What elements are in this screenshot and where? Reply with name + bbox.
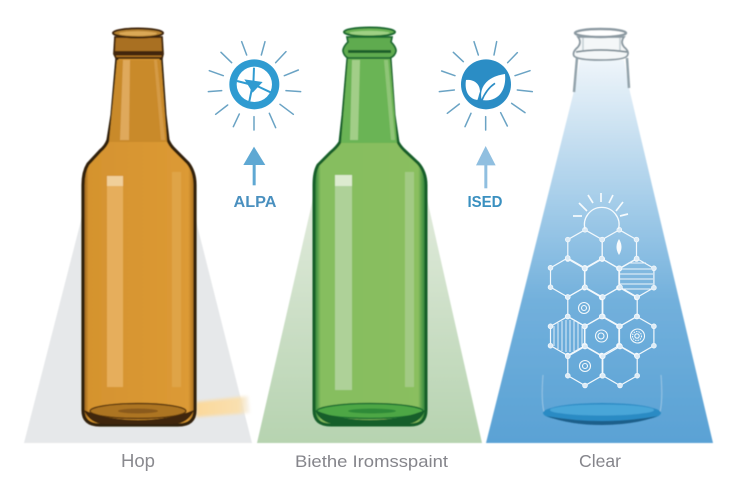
- label: Clear: Clear: [579, 451, 621, 471]
- icon: sun badge: [208, 42, 301, 130]
- green bottle: [314, 28, 426, 425]
- clear bottle: [542, 29, 662, 425]
- icon group: recycle sun with ALPA arrow: [208, 42, 301, 211]
- icon: sun outline: [573, 193, 628, 229]
- blue light beam: [486, 60, 713, 443]
- icon group: leaf sun with ISED arrow: [439, 42, 532, 211]
- icon: cell circles: [578, 302, 644, 372]
- panel: clear bottle: [486, 29, 713, 471]
- hexagon network diagram: [548, 193, 656, 388]
- green light beam: [257, 190, 482, 443]
- panel: amber bottle: [24, 28, 252, 471]
- striped hexagon: horizontal: [620, 263, 653, 289]
- striped hexagon: vertical: [554, 320, 582, 352]
- grey light beam: [24, 205, 252, 443]
- arrow: up to leaf sun: [476, 146, 496, 188]
- label: Hop: Hop: [121, 451, 155, 471]
- icon: leaf sun badge: [439, 42, 532, 130]
- panel: green bottle: [257, 28, 482, 471]
- label: Biethe Iromsspaint: Biethe Iromsspaint: [295, 452, 448, 471]
- label: ALPA: ALPA: [234, 194, 277, 211]
- icon: water drop: [617, 240, 621, 254]
- label: ISED: ISED: [468, 194, 502, 211]
- amber light reflection: [196, 396, 250, 417]
- arrow: up to sun: [243, 147, 265, 185]
- amber bottle: [83, 28, 195, 425]
